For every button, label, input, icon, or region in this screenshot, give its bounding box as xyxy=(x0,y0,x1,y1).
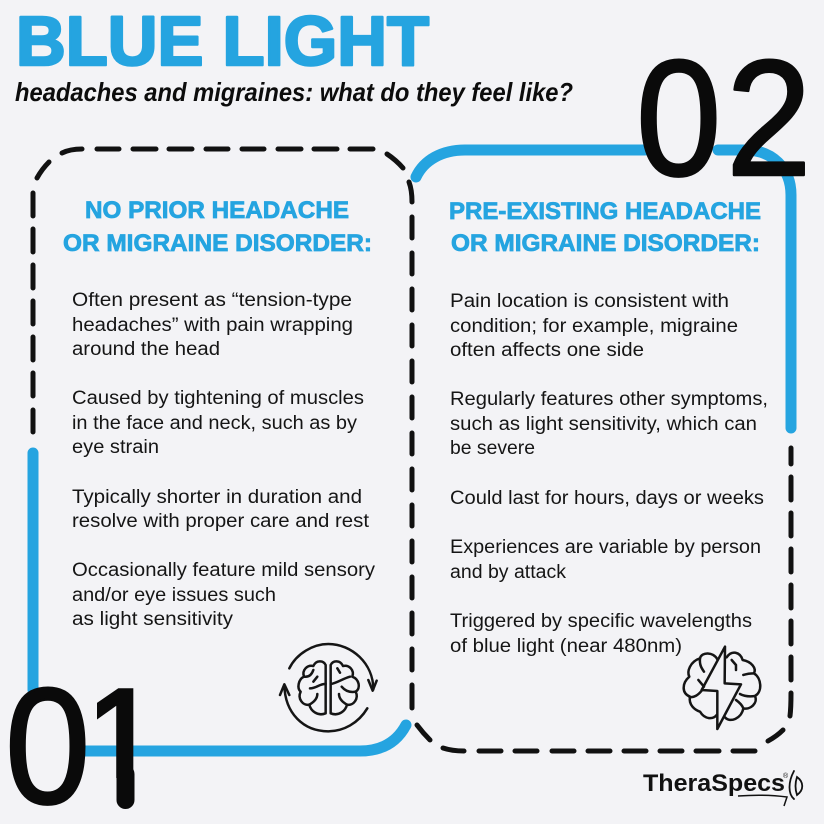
heading: pre-existing disorder: OR MIGRAINE DISORDER: xyxy=(451,230,760,257)
text block: no prior disorder symptoms: Typically shorter in duration and xyxy=(72,486,362,508)
text block: no prior disorder symptoms xyxy=(72,289,375,630)
text block: pre-existing disorder symptoms: Experiences are variable by person xyxy=(450,536,761,558)
text block: pre-existing disorder symptoms: of blue light (near 480nm) xyxy=(450,635,682,657)
text block: no prior disorder symptoms: around the head xyxy=(72,338,220,360)
number 02: 02 xyxy=(636,26,812,210)
text block: pre-existing disorder symptoms: and by attack xyxy=(450,561,566,583)
panel outline: no prior disorder, dashed part xyxy=(33,149,412,708)
icon: brain with circular arrows xyxy=(280,644,377,731)
panel outline: no prior disorder, solid blue part xyxy=(33,453,406,751)
text block: no prior disorder symptoms: and/or eye issues such xyxy=(72,584,276,606)
text block: pre-existing disorder symptoms: often affects one side xyxy=(450,339,644,361)
text block: pre-existing disorder symptoms: condition; for example, migraine xyxy=(450,315,738,337)
heading: pre-existing disorder xyxy=(449,198,761,257)
heading: no prior disorder: OR MIGRAINE DISORDER: xyxy=(63,230,372,257)
heading: pre-existing disorder: PRE-EXISTING HEADACHE xyxy=(449,198,761,225)
text block: no prior disorder symptoms: Often present as “tension-type xyxy=(72,289,352,311)
logo: TheraSpecs xyxy=(643,770,802,806)
heading: no prior disorder: NO PRIOR HEADACHE xyxy=(85,197,349,224)
text block: pre-existing disorder symptoms: such as light sensitivity, which can xyxy=(450,413,757,435)
logo: TheraSpecs: TheraSpecs xyxy=(643,770,785,797)
panel outline: pre-existing disorder, dashed part xyxy=(417,448,791,751)
heading: no prior disorder xyxy=(63,197,372,257)
text block: no prior disorder symptoms: resolve with proper care and rest xyxy=(72,510,370,532)
text block: pre-existing disorder symptoms: Triggered by specific wavelengths xyxy=(450,610,752,632)
text block: pre-existing disorder symptoms: Pain location is consistent with xyxy=(450,290,729,312)
text block: no prior disorder symptoms: Occasionally feature mild sensory xyxy=(72,559,375,581)
text block: no prior disorder symptoms: eye strain xyxy=(72,436,159,458)
text block: pre-existing disorder symptoms: Could last for hours, days or weeks xyxy=(450,487,764,509)
number 01 xyxy=(10,686,134,809)
text block: pre-existing disorder symptoms xyxy=(450,290,768,657)
text block: pre-existing disorder symptoms: be severe xyxy=(450,437,535,459)
subtitle: headaches and migraines: what do they feel like? xyxy=(15,77,573,107)
text block: no prior disorder symptoms: in the face and neck, such as by xyxy=(72,412,357,434)
text block: pre-existing disorder symptoms: Regularly features other symptoms, xyxy=(450,388,768,410)
title: BLUE LIGHT xyxy=(16,2,429,80)
text block: no prior disorder symptoms: headaches” with pain wrapping xyxy=(72,314,353,336)
text block: no prior disorder symptoms: as light sensitivity xyxy=(72,608,233,630)
text block: no prior disorder symptoms: Caused by tightening of muscles xyxy=(72,387,364,409)
panel outline: pre-existing disorder, solid blue part xyxy=(416,150,791,428)
icon: brain with lightning bolt xyxy=(684,647,760,729)
logo: TheraSpecs: ® xyxy=(783,772,789,780)
